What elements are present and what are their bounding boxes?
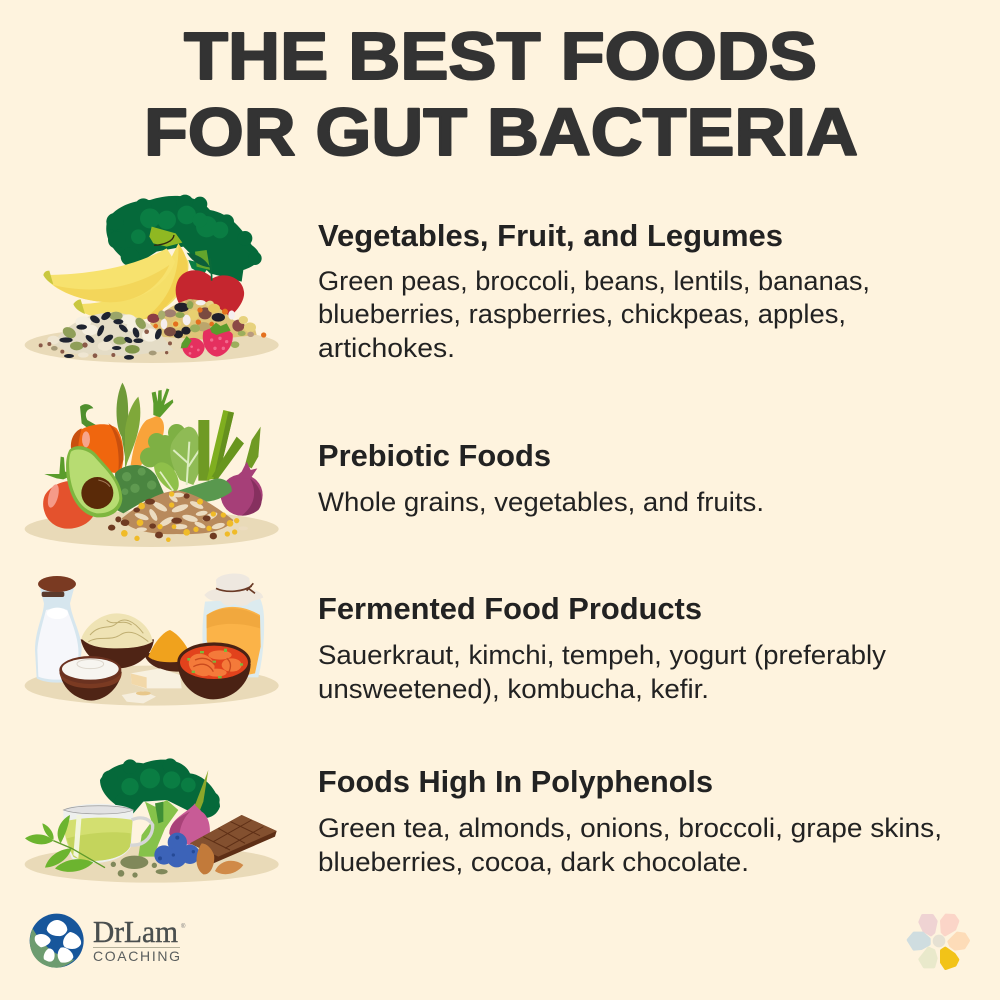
broccoli cluster [115, 465, 164, 513]
text: vegetables list: Green peas, broccoli, beans, lentils, bananas, [318, 266, 870, 296]
almonds [196, 843, 214, 874]
text: vegetables list: blueberries, raspberries, chickpeas, apples, [318, 299, 846, 329]
illustration: foods high in polyphenols [25, 758, 279, 883]
text: prebiotic list: Whole grains, vegetables, and fruits. [318, 487, 764, 517]
yogurt bowl [59, 670, 122, 701]
heading: fermented: Fermented Food Products [318, 591, 702, 626]
milk bottle [35, 588, 82, 683]
tomato [43, 481, 96, 529]
onion [221, 474, 263, 516]
text: polyphenols list: Green tea, almonds, onions, broccoli, grape skins, [318, 813, 942, 843]
asparagus [116, 383, 128, 467]
top banana [43, 248, 175, 302]
carrot [131, 416, 164, 467]
chocolate [190, 815, 277, 863]
tea leaves [25, 815, 93, 872]
text: vegetables list: artichokes. [318, 333, 455, 363]
cucumber [170, 478, 232, 502]
logo mark [30, 914, 84, 968]
second banana [73, 243, 189, 320]
title: THE BEST FOODS [184, 19, 817, 94]
text: vegetables list [318, 266, 870, 363]
tempeh [131, 668, 182, 688]
apple [176, 270, 244, 317]
kimchi bowl [178, 663, 251, 699]
illustration: vegetables, fruit and legumes [25, 195, 279, 363]
logo subtitle: COACHING [93, 948, 180, 964]
title: FOR GUT BACTERIA [144, 95, 858, 170]
text: fermented list: unsweetened), kombucha, kefir. [318, 674, 709, 704]
avocado [66, 446, 122, 517]
tea cup [63, 804, 133, 863]
spice bowl [144, 650, 190, 672]
green seeds [120, 856, 148, 869]
onion [169, 803, 210, 845]
heading: polyphenols: Foods High In Polyphenols [318, 764, 713, 799]
broccoli [100, 760, 220, 818]
text: fermented list: Sauerkraut, kimchi, tempeh, yogurt (preferably [318, 640, 887, 670]
leafy greens [140, 424, 185, 473]
illustration: prebiotic foods [25, 383, 279, 547]
heading: vegetables: Vegetables, Fruit, and Legumes [318, 218, 783, 253]
heading: prebiotic foods: Prebiotic Foods [318, 438, 551, 473]
logo: DrLam Coaching [30, 914, 186, 968]
stem [149, 227, 182, 247]
title [144, 19, 858, 170]
icon: flower [908, 915, 968, 968]
illustration: fermented food products [25, 573, 279, 706]
grain pile [122, 491, 233, 534]
noodle bowl [81, 639, 154, 668]
text: fermented list [318, 640, 887, 704]
registered mark: ® [181, 923, 186, 930]
logo wordmark: DrLam [93, 914, 178, 949]
pepper [80, 404, 96, 430]
jar [202, 598, 264, 677]
left pile [52, 312, 173, 356]
right pile [150, 299, 257, 340]
blueberries [154, 833, 200, 867]
raspberries [203, 327, 233, 357]
text: polyphenols list [318, 813, 942, 877]
text: polyphenols list: blueberries, cocoa, dark chocolate. [318, 847, 749, 877]
stalks [198, 420, 209, 481]
